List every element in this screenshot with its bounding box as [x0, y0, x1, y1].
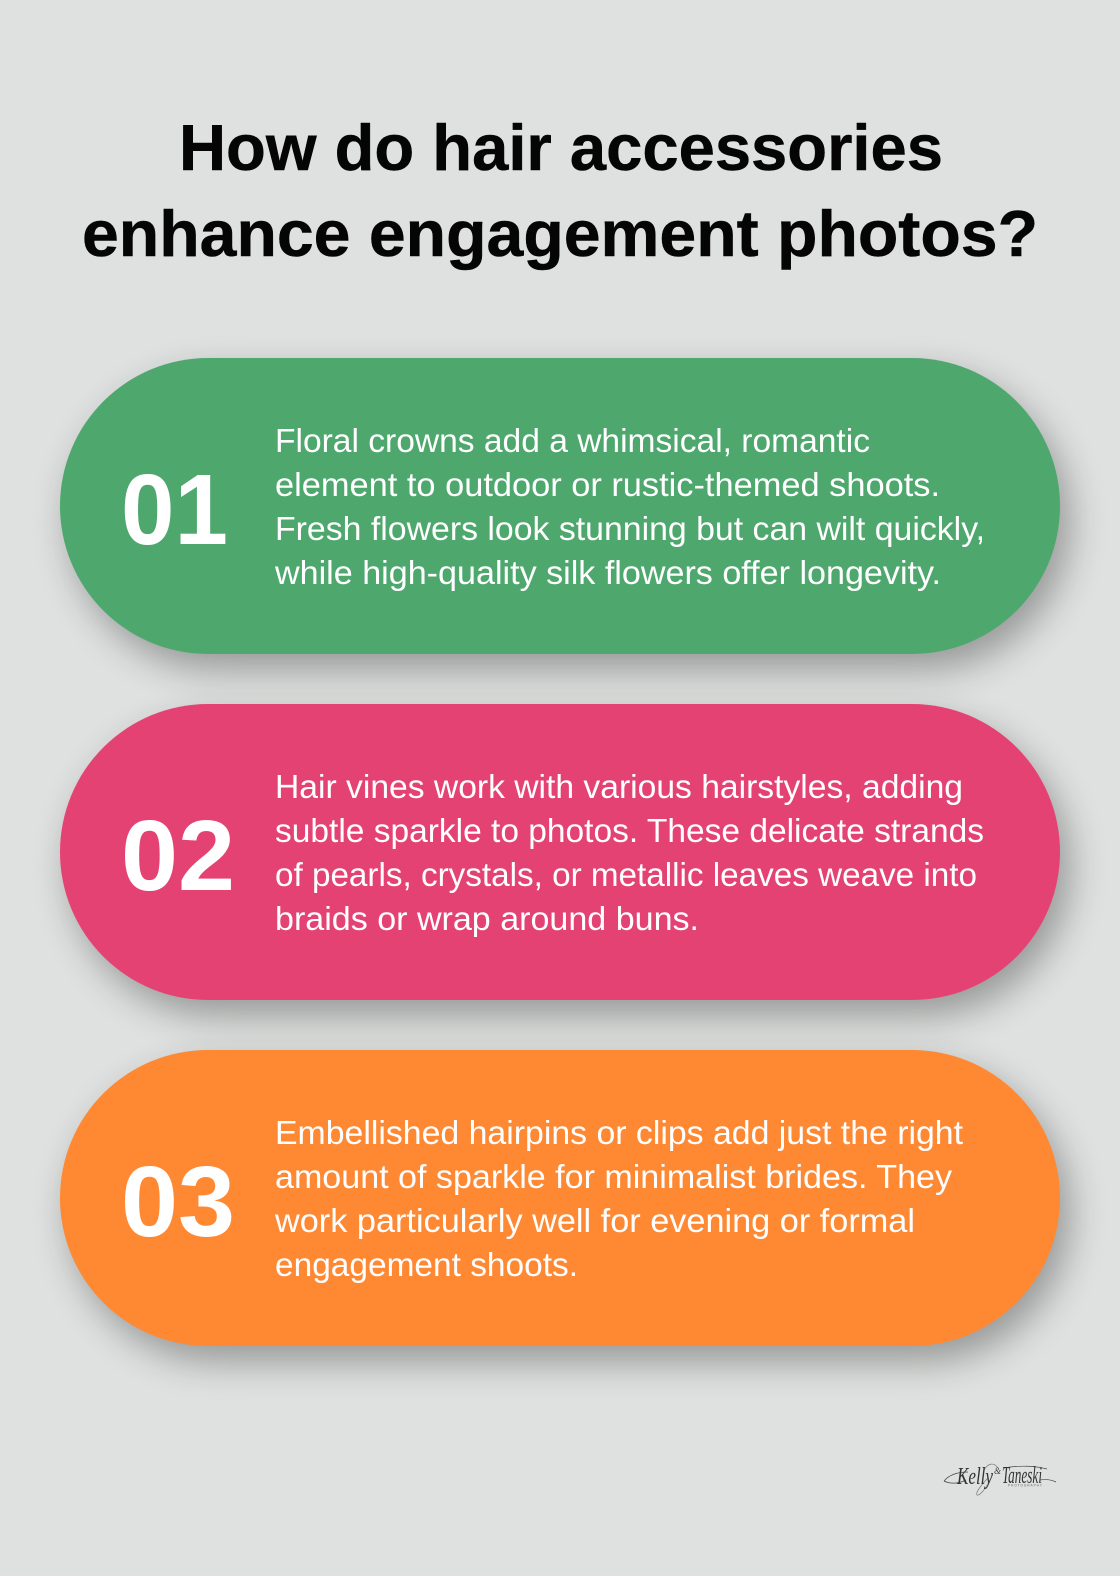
logo: Kelly & Taneski Photography signature: Kelly — [956, 1464, 993, 1490]
text block: hairpins: engagement shoots. — [275, 1246, 578, 1283]
text block: floral crowns: Floral crowns add a whimsical, romantic — [275, 422, 870, 459]
text block: hairpins: work particularly well for evening or formal — [274, 1202, 915, 1239]
title: How do hair accessories — [179, 111, 943, 184]
text block: hair vines — [275, 768, 984, 937]
panel: step 03 hairpins — [60, 1050, 1060, 1346]
title — [82, 111, 1038, 270]
number 01: 01 — [121, 454, 228, 566]
text block: hairpins: Embellished hairpins or clips add just the right — [275, 1114, 963, 1151]
text block: hairpins — [274, 1114, 963, 1283]
text block: hair vines: braids or wrap around buns. — [275, 900, 699, 937]
text block: hair vines: of pearls, crystals, or metallic leaves weave into — [275, 856, 977, 893]
text block: hair vines: subtle sparkle to photos. These delicate strands — [275, 812, 984, 849]
text block: floral crowns: element to outdoor or rustic-themed shoots. — [275, 466, 940, 503]
text block: hairpins: amount of sparkle for minimalist brides. They — [275, 1158, 953, 1195]
text block: floral crowns: while high-quality silk flowers offer longevity. — [274, 554, 941, 591]
number 02: 02 — [121, 800, 235, 912]
text block: hair vines: Hair vines work with various hairstyles, adding — [275, 768, 963, 805]
panel: step 02 hair vines — [60, 704, 1060, 1000]
text block: floral crowns: Fresh flowers look stunning but can wilt quickly, — [275, 510, 985, 547]
logo: Kelly & Taneski Photography signature: PHOTOGRAPHY — [1008, 1484, 1043, 1488]
title: enhance engagement photos? — [82, 197, 1038, 270]
logo: Kelly & Taneski Photography signature: & — [994, 1466, 1001, 1476]
text block: floral crowns — [274, 422, 985, 591]
panel: step 01 floral crowns — [60, 358, 1060, 654]
logo: Kelly & Taneski Photography signature — [944, 1463, 1056, 1496]
number 03: 03 — [121, 1146, 235, 1258]
